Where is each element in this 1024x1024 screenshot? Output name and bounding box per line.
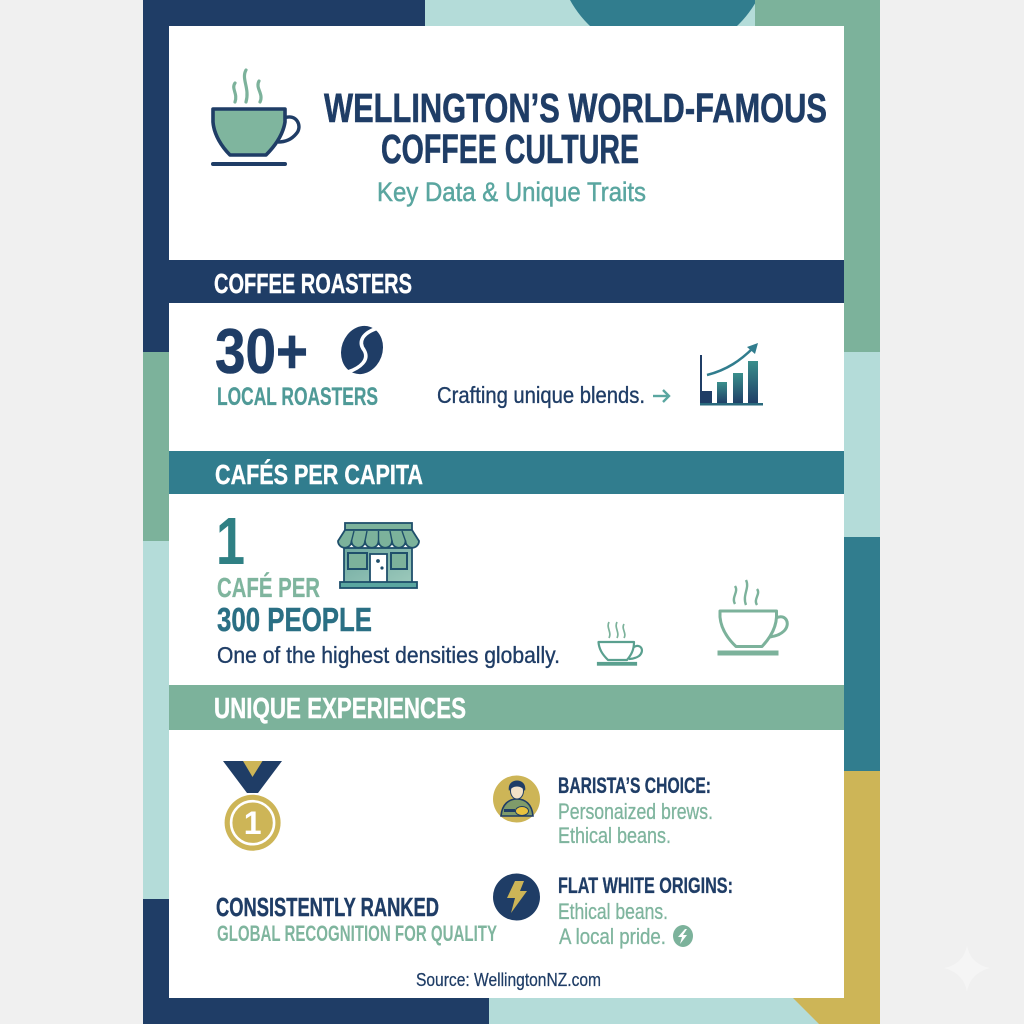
text: flat white origins: A local pride. (559, 924, 666, 949)
text: flat white origins: FLAT WHITE ORIGINS: (558, 873, 733, 898)
icon: gold medal: 1 (244, 805, 261, 841)
label: local roasters: LOCAL ROASTERS (217, 383, 378, 411)
text: barista's choice: Ethical beans. (558, 823, 671, 848)
icon: gold medal (223, 761, 282, 851)
text: crafting unique blends: Crafting unique blends. (437, 382, 645, 408)
icon: small coffee cup (598, 622, 642, 665)
label: cafe per: CAFÉ PER (217, 572, 320, 603)
heading band: cafes per capita (169, 451, 844, 494)
text: barista's choice (558, 773, 713, 848)
white content panel (169, 26, 844, 998)
stat: 1: 1 (216, 504, 245, 579)
text: flat white origins: Ethical beans. (558, 899, 668, 924)
text: highest densities: One of the highest densities globally. (217, 642, 560, 668)
icon: growth bar chart (700, 343, 763, 406)
title: COFFEE CULTURE (381, 126, 639, 172)
icon: lightning bolt badge (493, 874, 540, 920)
text: flat white origins (558, 873, 733, 949)
icon: cafe storefront (338, 523, 419, 588)
icon: large coffee cup (719, 580, 787, 654)
label: 300 people: 300 PEOPLE (217, 601, 372, 638)
icon: barista (493, 776, 540, 822)
section: coffee roasters (169, 260, 844, 411)
sparkle watermark (944, 945, 990, 992)
icon: coffee cup with steam (211, 70, 299, 166)
stat: 30+: 30+ (215, 317, 308, 387)
arrow (653, 390, 669, 402)
title: WELLINGTON’S WORLD-FAMOUS (324, 85, 827, 131)
heading band: cafes per capita: CAFÉS PER CAPITA (215, 459, 423, 490)
title (324, 85, 827, 172)
subtitle: Key Data & Unique Traits (377, 177, 646, 207)
section: cafes per capita (169, 451, 844, 668)
heading band: unique experiences: UNIQUE EXPERIENCES (214, 693, 466, 725)
label: global recognition: GLOBAL RECOGNITION FOR QUALITY (217, 921, 497, 946)
header section (211, 70, 827, 207)
heading band: coffee roasters (169, 260, 844, 303)
source: Source: WellingtonNZ.com (416, 970, 601, 990)
heading band: unique experiences (169, 685, 844, 730)
label: consistently ranked: CONSISTENTLY RANKED (216, 892, 439, 922)
icon: coffee bean (334, 320, 390, 380)
text: barista's choice: BARISTA’S CHOICE: (558, 773, 711, 798)
text: barista's choice: Personaized brews. (558, 799, 713, 824)
icon: small bolt badge (673, 925, 693, 947)
section: unique experiences (169, 685, 844, 990)
heading band: coffee roasters: COFFEE ROASTERS (214, 268, 412, 299)
